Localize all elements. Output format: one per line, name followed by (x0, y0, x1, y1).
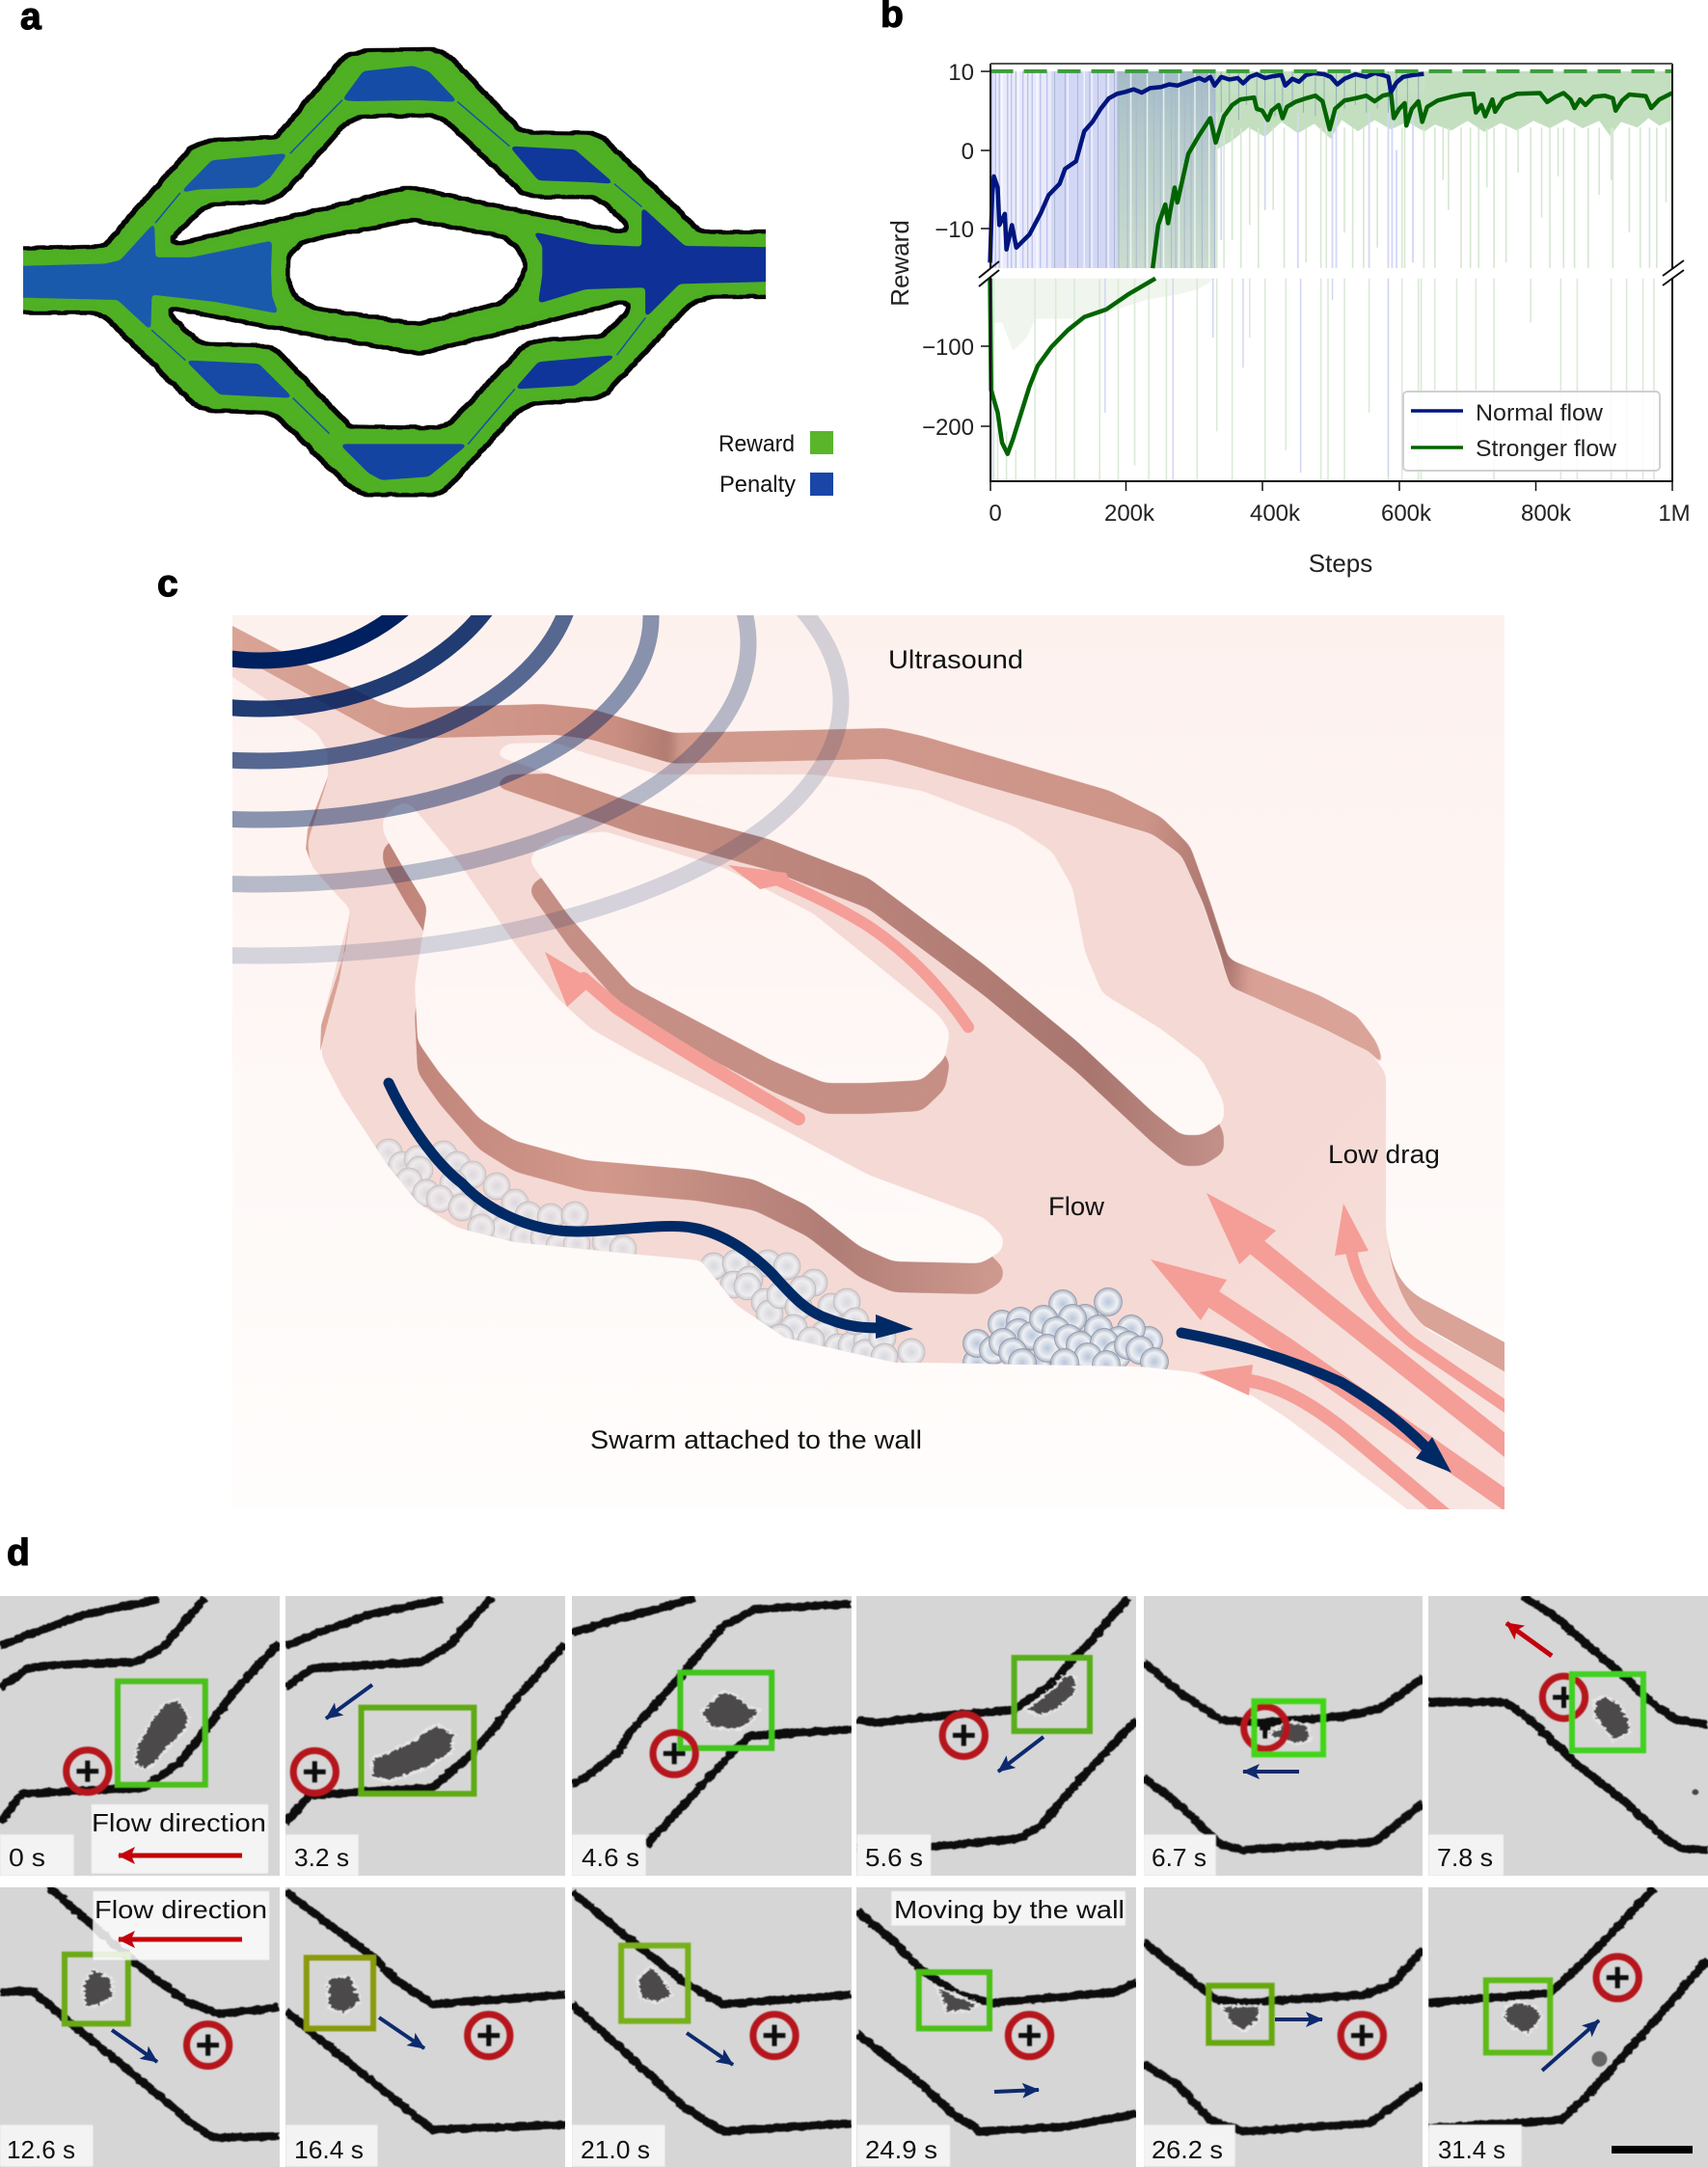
channel floor (232, 667, 1505, 1509)
panel c: illustrated channel with ultrasound (232, 615, 1505, 1509)
navy path arrow right (1181, 1333, 1451, 1473)
panel b: reward learning curves (885, 60, 1691, 578)
channel holes (383, 743, 1224, 1263)
photo 6.7 s: 6.7 s (1152, 1843, 1206, 1872)
x axis title: Steps (1309, 549, 1372, 578)
axes frame (990, 64, 1672, 481)
streaks and curves (980, 71, 1672, 481)
photo 12.6 s (0, 1887, 280, 2167)
swarm in junction (962, 1288, 1169, 1379)
photo 26.2 s: 26.2 s (1152, 2135, 1223, 2164)
x tick labels: 400k (1250, 501, 1301, 527)
photo 0 s: 0 s (9, 1843, 45, 1872)
y tick labels: −10 (935, 217, 974, 243)
photo 31.4 s (1428, 1887, 1708, 2167)
legend: reward and penalty (718, 431, 833, 498)
label d: d (7, 1532, 30, 1574)
text: Flow: Flow (1048, 1192, 1105, 1221)
photo 16.4 s (285, 1887, 565, 2167)
x tick labels: 0 (989, 501, 1002, 527)
photo 16.4 s: 16.4 s (294, 2135, 364, 2164)
photo 5.6 s (856, 1596, 1136, 1876)
x tick labels: 200k (1104, 501, 1155, 527)
photo 4.6 s (572, 1596, 852, 1876)
chart legend (1403, 392, 1660, 471)
y tick labels: −200 (922, 415, 974, 441)
legend: reward and penalty: Penalty (719, 472, 796, 498)
channel outer walls (232, 625, 1381, 1061)
x tick labels (989, 501, 1691, 527)
navy path arrow left (389, 1083, 913, 1339)
photo 24.9 s: Moving by the wall (894, 1895, 1125, 1924)
photo 3.2 s: 3.2 s (294, 1843, 349, 1872)
photo 0 s: Flow direction (92, 1808, 266, 1837)
ultrasound rings (232, 615, 849, 964)
photo 5.6 s: 5.6 s (865, 1843, 923, 1872)
photo 12.6 s: Flow direction (95, 1895, 267, 1924)
photo 24.9 s: 24.9 s (865, 2135, 937, 2164)
text: Low drag: Low drag (1328, 1140, 1440, 1169)
swarm on lower-left wall (375, 1139, 637, 1262)
text: Ultrasound: Ultrasound (888, 645, 1023, 674)
hole walls (383, 773, 1224, 1294)
x tick labels: 1M (1658, 501, 1691, 527)
chart legend: Stronger flow (1476, 436, 1617, 462)
photo 21.0 s (572, 1887, 852, 2167)
wall strip left (320, 909, 351, 1051)
photo 12.6 s: 12.6 s (7, 2135, 75, 2164)
chart legend: Normal flow (1476, 400, 1604, 426)
photo 7.8 s (1428, 1596, 1708, 1876)
y tick labels: −100 (922, 335, 974, 361)
photo 24.9 s (856, 1887, 1136, 2167)
photo 21.0 s: 21.0 s (581, 2135, 650, 2164)
photo 31.4 s: 31.4 s (1438, 2135, 1505, 2164)
photo 3.2 s (285, 1596, 565, 1876)
pink flow arrows (545, 865, 1519, 1524)
y axis title: Reward (885, 220, 914, 307)
legend: reward and penalty: Reward (718, 431, 795, 457)
photo 26.2 s (1144, 1887, 1423, 2167)
label c: c (157, 563, 178, 605)
y tick labels: 0 (962, 139, 974, 165)
x tick labels: 600k (1381, 501, 1432, 527)
wall strip upper left (306, 776, 330, 861)
y tick labels (922, 60, 974, 441)
photo 6.7 s (1144, 1596, 1423, 1876)
swarm on middle wall (700, 1250, 925, 1370)
panel a: channel reward map (0, 50, 821, 494)
text: Swarm attached to the wall: Swarm attached to the wall (590, 1425, 922, 1454)
x tick labels: 800k (1521, 501, 1572, 527)
y tick labels: 10 (948, 60, 974, 86)
scale bar (1612, 2146, 1693, 2153)
photo 7.8 s: 7.8 s (1437, 1843, 1493, 1872)
photo 0 s (0, 1596, 280, 1876)
photo 4.6 s: 4.6 s (582, 1843, 639, 1872)
wall strip lower right (1386, 1229, 1505, 1371)
